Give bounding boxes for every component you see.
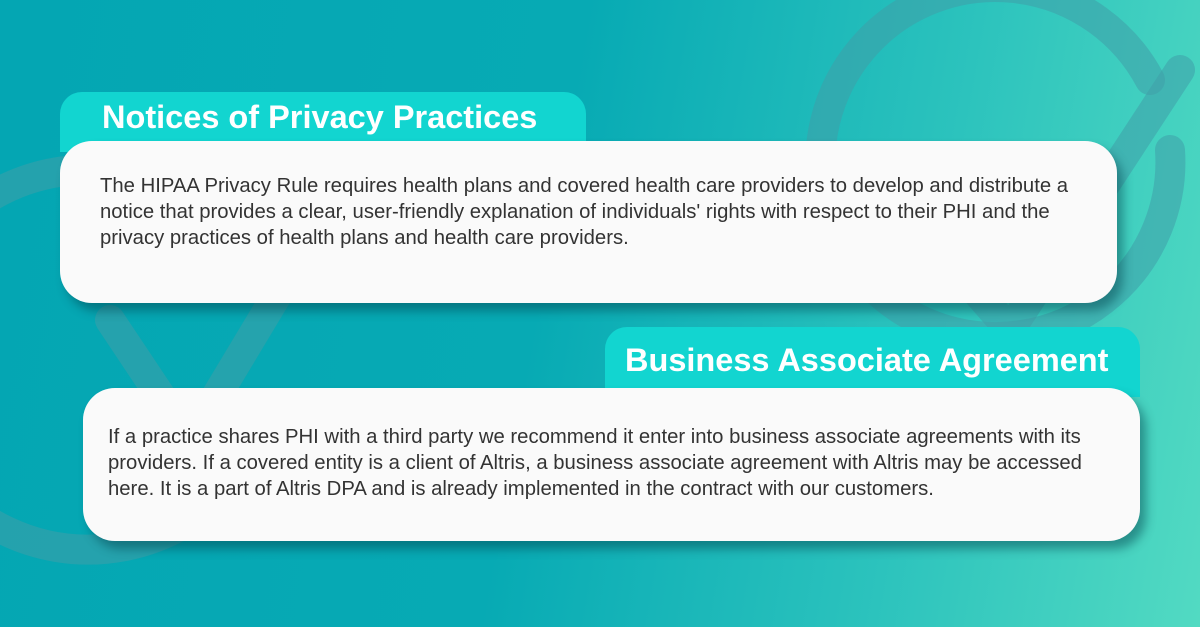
text card: notices [60,141,1117,303]
text card: business associate: If a practice shares PHI with a third party we recommend it enter into business associate agreements with its [108,426,1081,448]
text card: business associate: providers. If a covered entity is a client of Altris, a business associate agreement with Altris may be accessed [108,452,1082,474]
text card: notices: notice that provides a clear, user-friendly explanation of individuals' rights with respect to their PHI and the [100,201,1050,223]
heading tab: Business Associate Agreement [605,327,1140,397]
text card: notices: privacy practices of health plans and health care providers. [100,227,629,249]
text card: business associate: here. It is a part of Altris DPA and is already implemented in the contract with our customers. [108,478,934,500]
heading tab: Notices of Privacy Practices: Notices of Privacy Practices [102,99,537,135]
panel: notices of privacy practices [60,92,1128,316]
text card: notices: The HIPAA Privacy Rule requires health plans and covered health care providers to develop and distribute a [100,175,1068,197]
panel: business associate agreement [83,327,1152,554]
heading tab: Notices of Privacy Practices [60,92,586,152]
heading tab: Business Associate Agreement: Business Associate Agreement [625,342,1108,378]
text card: business associate [83,388,1140,541]
